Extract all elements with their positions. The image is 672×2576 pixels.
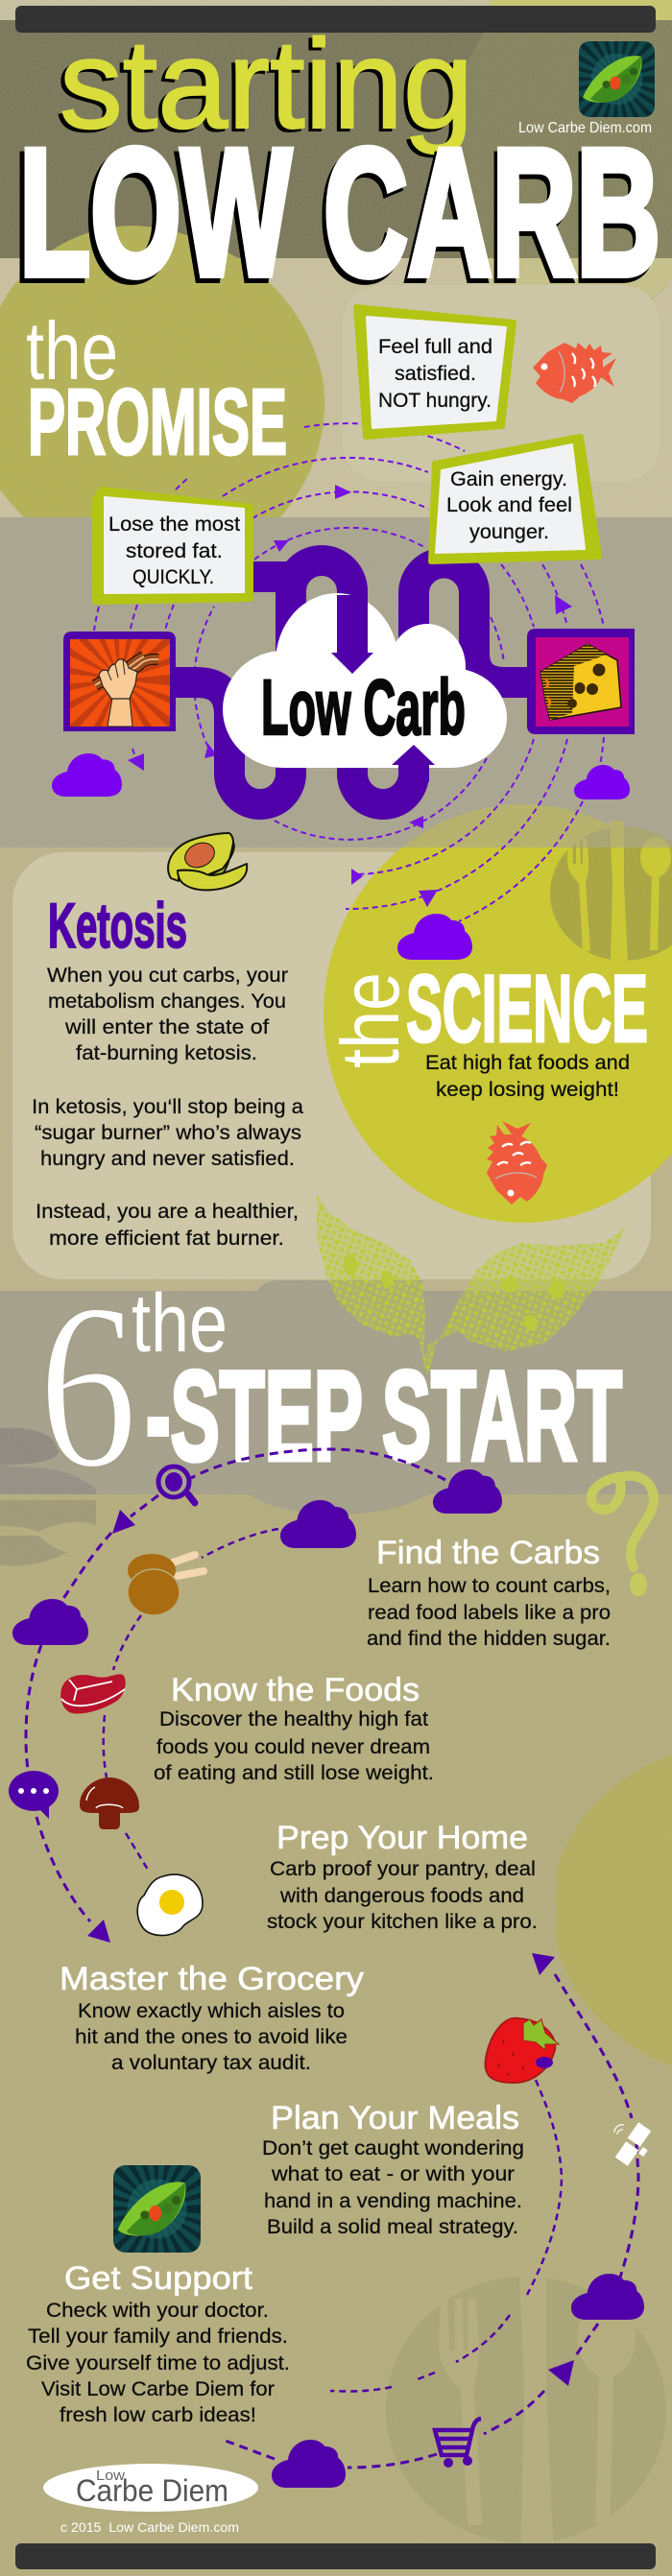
heading: the promise: PROMISE — [28, 370, 287, 474]
logo: low carbe diem: Carbe Diem — [76, 2473, 228, 2508]
bottom bar — [15, 2543, 656, 2569]
callout: lose fat: Lose the most — [108, 513, 240, 536]
icon: magnifier — [158, 1467, 195, 1503]
heading: the 6-step start: the — [132, 1277, 228, 1370]
step: master the grocery: hit and the ones to avoid like — [75, 2025, 348, 2048]
logo icon lower — [113, 2165, 201, 2253]
step: find the carbs: read food labels like a pro — [368, 1601, 611, 1624]
step: get support — [26, 2260, 290, 2426]
step: master the grocery: a voluntary tax audit. — [111, 2051, 311, 2074]
step: prep your home: Prep Your Home — [276, 1820, 528, 1856]
callout: feel full: satisfied. — [395, 362, 476, 385]
step: prep your home: Carb proof your pantry, deal — [270, 1857, 536, 1880]
icon: speech bubble — [9, 1771, 59, 1819]
icon: strawberry — [486, 2018, 559, 2083]
icon: egg — [137, 1874, 203, 1936]
step: get support: Check with your doctor. — [46, 2299, 269, 2322]
icon: fist with bacon — [63, 632, 176, 731]
panel: ketosis text: hungry and never satisfied. — [40, 1147, 295, 1170]
step: get support: Visit Low Carbe Diem for — [41, 2377, 275, 2400]
step: plan your meals: Don’t get caught wondering — [262, 2136, 524, 2159]
step: get support: Give yourself time to adjust. — [26, 2351, 290, 2374]
step: know the foods: of eating and still lose weight. — [154, 1761, 434, 1784]
title: starting — [60, 13, 473, 155]
heading: the science — [325, 955, 648, 1068]
science text: Eat high fat foods and — [425, 1051, 630, 1074]
step: prep your home — [267, 1820, 538, 1933]
icon: steak — [60, 1674, 126, 1713]
title — [14, 13, 660, 318]
callout: gain energy: younger. — [469, 520, 549, 543]
panel: ketosis text: Instead, you are a healthier, — [36, 1200, 299, 1223]
step: get support: fresh low carb ideas! — [60, 2403, 256, 2426]
heading: the promise — [26, 306, 287, 474]
step path: outer left — [26, 1449, 445, 1943]
step: know the foods: Know the Foods — [171, 1672, 420, 1708]
icon: drumstick — [128, 1554, 204, 1615]
step: find the carbs: Learn how to count carbs, — [368, 1574, 611, 1597]
panel: ketosis text: When you cut carbs, your — [47, 964, 288, 987]
callout: lose fat — [95, 489, 251, 602]
panel: ketosis text — [32, 890, 303, 1250]
decoration: grey bacon shapes — [0, 1428, 96, 1566]
step: master the grocery — [60, 1961, 364, 2074]
title: starting — [56, 16, 469, 157]
flow pipes — [176, 561, 538, 804]
step: plan your meals: what to eat - or with your — [271, 2162, 515, 2185]
logo: low carbe diem — [43, 2464, 258, 2512]
step: plan your meals — [262, 2100, 524, 2238]
icon: fish — [533, 343, 616, 403]
icon: avocado — [168, 833, 247, 890]
central cloud — [223, 593, 507, 768]
logo icon top — [579, 41, 655, 117]
panel: ketosis text: more efficient fat burner. — [49, 1227, 284, 1250]
decoration: leaves — [317, 1195, 627, 1379]
step: get support: Tell your family and friends. — [28, 2325, 288, 2348]
callout: lose fat: stored fat. — [126, 539, 223, 562]
top bar — [15, 6, 656, 33]
heading: the 6-step start: 6 — [38, 1255, 137, 1517]
callout: lose fat: QUICKLY. — [132, 565, 214, 588]
heading: the science: the — [325, 972, 417, 1068]
step: know the foods: foods you could never dream — [156, 1735, 430, 1758]
step: prep your home: stock your kitchen like a pro. — [267, 1910, 538, 1933]
step: find the carbs: and find the hidden sugar. — [367, 1627, 611, 1650]
heading: the promise: the — [26, 306, 118, 397]
callout: feel full — [356, 307, 514, 437]
step: master the grocery: Know exactly which aisles to — [78, 1999, 345, 2022]
step: plan your meals: Build a solid meal strategy. — [267, 2215, 518, 2238]
central label: Low Carb — [261, 664, 466, 751]
step: know the foods: Discover the healthy high fat — [159, 1707, 428, 1730]
copyright: c 2015 Low Carbe Diem.com — [60, 2519, 239, 2535]
decoration: question mark — [591, 1476, 654, 1591]
panel: ketosis text: In ketosis, you‘ll stop being a — [32, 1095, 303, 1118]
icon: fish vertical — [487, 1121, 547, 1205]
step: find the carbs — [367, 1535, 611, 1650]
icon: satellite — [614, 2122, 651, 2166]
icon: small clouds — [52, 753, 630, 960]
step: prep your home: with dangerous foods and — [279, 1884, 524, 1907]
step: plan your meals: Plan Your Meals — [271, 2100, 519, 2136]
callout: gain energy: Gain energy. — [450, 467, 567, 490]
callout: feel full: NOT hungry. — [378, 389, 492, 412]
callout: gain energy: Look and feel — [446, 493, 572, 516]
step: find the carbs: Find the Carbs — [376, 1535, 600, 1571]
science text — [425, 1051, 630, 1101]
panel: science circle — [0, 797, 672, 1223]
step: plan your meals: hand in a vending machine. — [264, 2189, 522, 2212]
heading: the 6-step start — [38, 1255, 622, 1517]
decoration: plate with cutlery (lower) — [386, 2264, 666, 2548]
icon: mushroom — [80, 1777, 139, 1829]
callout: feel full: Feel full and — [378, 335, 492, 358]
step: get support: Get Support — [64, 2260, 253, 2297]
science text: keep losing weight! — [436, 1078, 619, 1101]
logo: low carbe diem: Low — [96, 2468, 125, 2484]
callout: gain energy — [431, 437, 599, 561]
panel: ketosis text: “sugar burner” who’s always — [35, 1121, 301, 1144]
icon: cheese — [527, 629, 635, 734]
panel: ketosis text: fat-burning ketosis. — [76, 1041, 257, 1064]
step path: clouds — [12, 1469, 644, 2488]
panel: ketosis text: metabolism changes. You — [48, 990, 286, 1013]
pipe arrows — [331, 595, 435, 782]
step path: right side — [223, 1953, 638, 2468]
icon: plate and cutlery — [550, 821, 672, 963]
panel: ketosis text: Ketosis — [48, 890, 187, 961]
icon: cart — [435, 2419, 481, 2468]
step: master the grocery: Master the Grocery — [60, 1961, 364, 1997]
panel: ketosis text: will enter the state of — [64, 1015, 269, 1038]
site name: Low Carbe Diem.com — [518, 120, 652, 136]
dashed orbit rings — [94, 423, 604, 921]
step: know the foods — [154, 1672, 434, 1784]
